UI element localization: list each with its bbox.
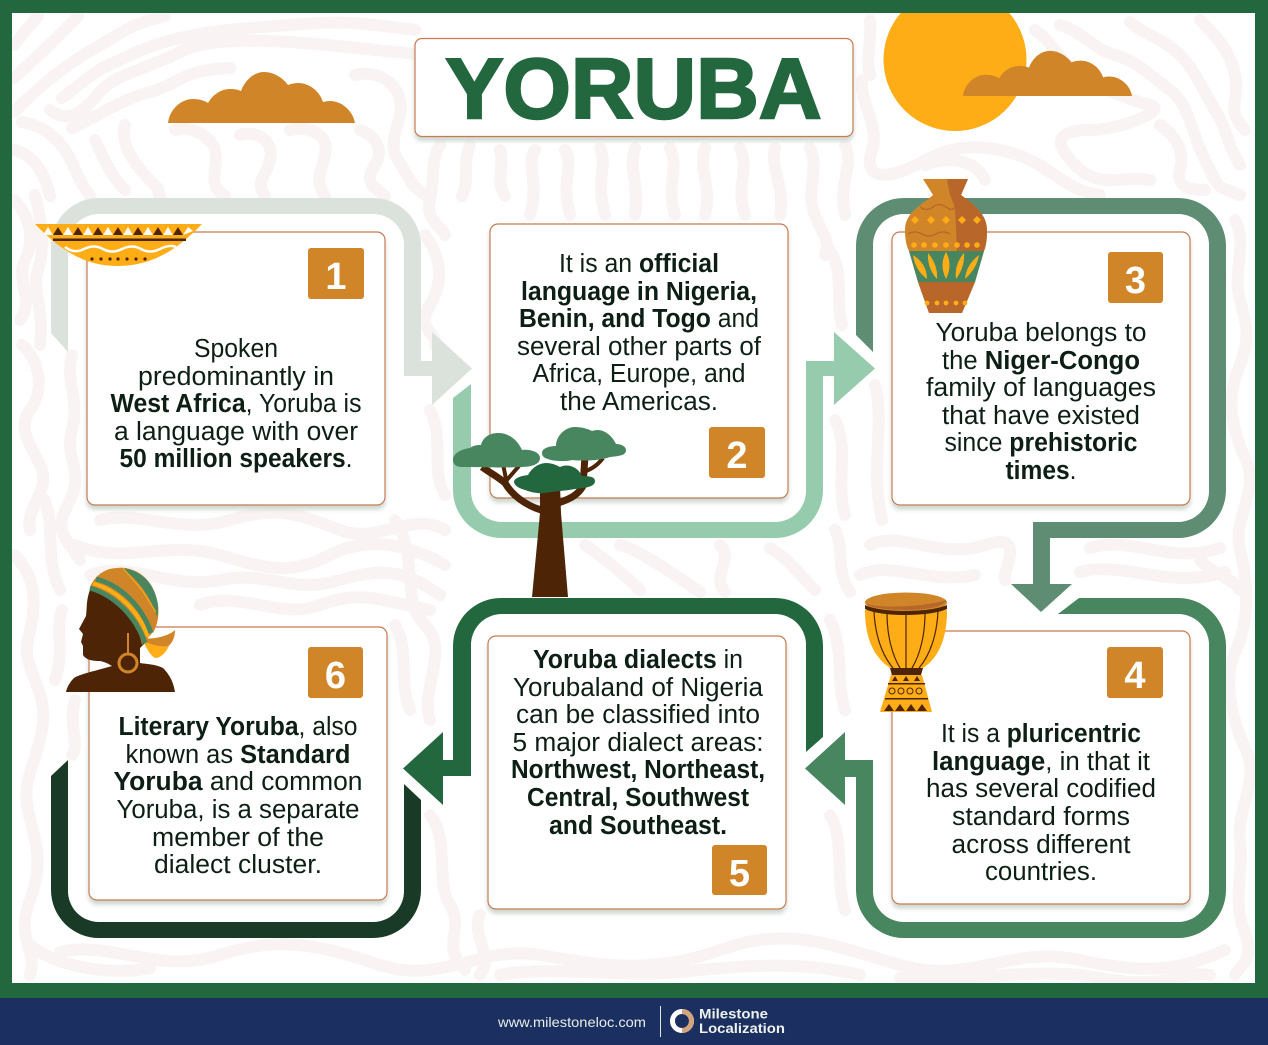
text: step 4 — [926, 720, 1156, 886]
text: step 6: known as Standard — [126, 741, 350, 769]
text: step 2: Africa, Europe, and — [532, 360, 746, 388]
arrow: step 3 to 4 — [856, 198, 1226, 612]
text: step 3: the Niger-Congo — [942, 347, 1140, 375]
footer logo — [672, 1006, 785, 1036]
text: step 6: Literary Yoruba, also — [118, 713, 358, 741]
text: step 5: can be classified into — [516, 701, 760, 729]
title: YORUBA — [446, 42, 822, 137]
badge 4: 4 — [1124, 655, 1146, 697]
icon: sun — [884, 13, 1026, 131]
text: step 6: member of the — [152, 824, 324, 852]
text: step 4: language, in that it — [932, 748, 1150, 776]
footer logo: Milestone — [699, 1006, 769, 1022]
text: step 1 — [110, 335, 361, 473]
text: step 1: Spoken — [194, 335, 278, 363]
arrow: step 5 to 6 — [403, 598, 823, 805]
footer bar — [0, 998, 1268, 1045]
badge 5 — [712, 845, 767, 895]
panel: step 5 — [488, 636, 786, 909]
icon: left cloud — [168, 72, 355, 123]
badge 6 — [308, 647, 363, 698]
text: step 3: that have existed — [942, 402, 1140, 430]
text: step 2: several other parts of — [517, 333, 762, 361]
text: step 6: Yoruba, is a separate — [116, 796, 360, 824]
text: step 1: a language with over — [114, 418, 359, 446]
text: step 6: Yoruba and common — [114, 768, 362, 796]
panel: step 4 — [892, 631, 1190, 904]
badge 1: 1 — [325, 256, 347, 298]
badge 2 — [709, 427, 765, 478]
text: step 2: language in Nigeria, — [521, 278, 757, 306]
footer logo: Localization — [699, 1021, 785, 1036]
text: step 2: the Americas. — [560, 388, 718, 416]
panel: step 2 — [490, 224, 788, 498]
panel: step 6 — [89, 627, 387, 900]
text: step 3: family of languages — [926, 374, 1156, 402]
badge 5: 5 — [729, 853, 750, 895]
text: step 5: Yorubaland of Nigeria — [513, 674, 764, 702]
badge 4 — [1107, 647, 1163, 698]
text: step 5 — [511, 646, 765, 840]
text: step 2: It is an official — [559, 250, 719, 278]
text: step 4: standard forms — [952, 803, 1130, 831]
badge 3: 3 — [1125, 260, 1146, 302]
arrow: step 2 to 3 — [453, 332, 875, 538]
text: step 5: and Southeast. — [549, 812, 727, 840]
text: step 5: Central, Southwest — [527, 784, 749, 812]
text: step 2 — [517, 250, 762, 416]
panel: step 3 — [892, 232, 1190, 505]
badge 3 — [1108, 252, 1163, 303]
text: step 3 — [926, 319, 1156, 485]
badge 1 — [308, 248, 364, 299]
badge 6: 6 — [325, 655, 346, 697]
icon: tree — [453, 427, 626, 597]
text: step 3: since prehistoric — [944, 429, 1138, 457]
text: step 5: Northwest, Northeast, — [511, 756, 765, 784]
text: step 4: countries. — [985, 858, 1097, 886]
footer website: www.milestoneloc.com — [497, 1014, 646, 1030]
text: step 6 — [114, 713, 362, 879]
text: step 6: dialect cluster. — [154, 851, 322, 879]
text: step 5: Yoruba dialects in — [533, 646, 743, 674]
text: step 1: predominantly in — [138, 363, 334, 391]
text: step 4: across different — [952, 831, 1130, 859]
arrow: step 1 to 2 — [51, 198, 472, 405]
text: step 1: West Africa, Yoruba is — [110, 390, 361, 418]
text: step 5: 5 major dialect areas: — [512, 729, 764, 757]
arrow: step 4 to 5 — [805, 598, 1226, 938]
icon: right cloud — [963, 51, 1132, 96]
text: step 4: It is a pluricentric — [941, 720, 1141, 748]
text: step 3: Yoruba belongs to — [936, 319, 1146, 347]
icon: woman with headwrap — [66, 568, 175, 692]
icon: vase — [905, 179, 987, 313]
text: step 1: 50 million speakers. — [120, 445, 353, 473]
arrow: step 6 return band — [51, 760, 421, 938]
icon: bowl — [35, 224, 202, 266]
text: step 2: Benin, and Togo and — [519, 305, 759, 333]
text: step 3: times. — [1006, 457, 1076, 485]
panel: step 1 — [87, 232, 385, 505]
badge 2: 2 — [726, 435, 748, 477]
icon: drum — [865, 592, 947, 712]
text: step 4: has several codified — [926, 775, 1156, 803]
